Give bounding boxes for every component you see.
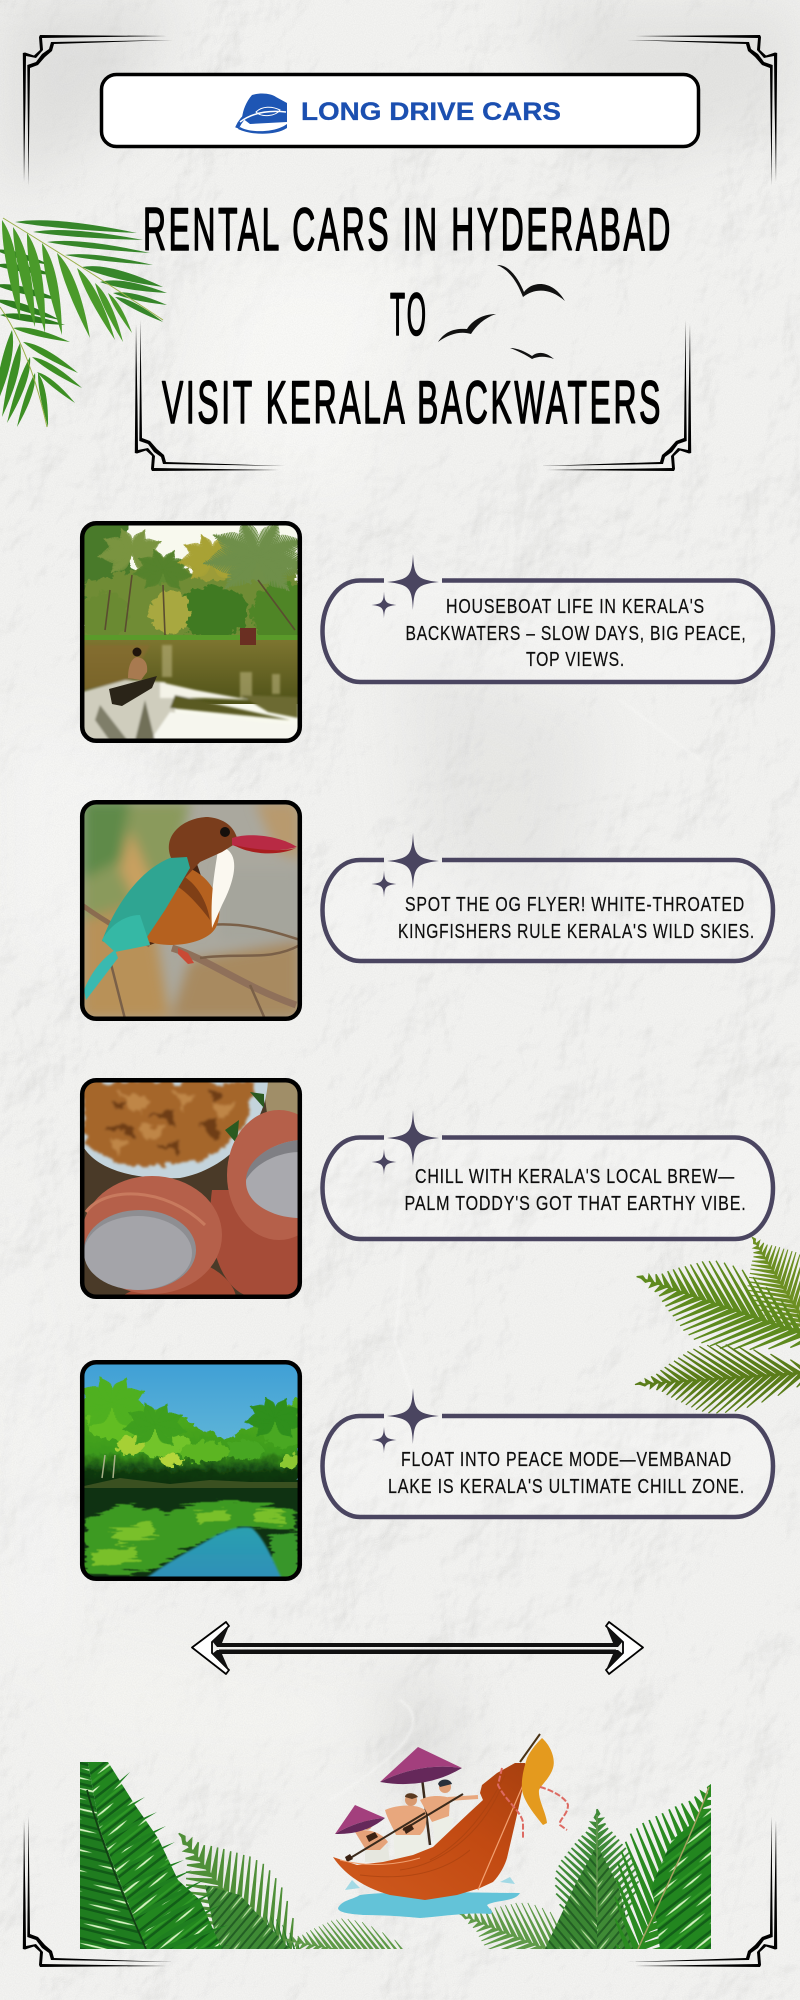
panel: palm toddy [82,1078,773,1297]
decorative frame: top right [627,35,777,186]
middle rower [385,1793,428,1860]
palm fronds: bottom [80,1762,711,1949]
illustration: snake boat with rowers [333,1734,568,1918]
title [143,196,673,436]
decorative frame: top left [23,35,173,186]
photo: backwater boat [80,514,315,741]
icon: car logo badge [237,94,287,134]
caption [388,1449,745,1498]
caption [404,1166,746,1215]
decorative frame: title left [135,320,285,471]
boat hull [333,1763,527,1900]
caption [406,596,746,671]
icon: large sparkle [387,554,439,610]
palm leaf: top left [0,217,168,428]
title: TO [390,281,428,348]
icon: small sparkle [372,1149,396,1175]
icon: small sparkle [372,592,396,618]
decorative frame: bottom right [627,1816,777,1967]
paddles [345,1794,463,1862]
caption [398,894,755,943]
callout pill [322,1110,773,1239]
front rower [420,1780,478,1845]
caption: HOUSEBOAT LIFE IN KERALA'S [446,596,705,618]
icon: small sparkle [372,1427,396,1453]
decorative frame: bottom left [23,1816,173,1967]
icon: small sparkle [372,871,396,897]
panel: vembanad lake [72,1362,773,1579]
small umbrella [335,1805,385,1834]
photo: palm-lined lake [72,1362,307,1579]
photo: clay pots of toddy [82,1078,331,1297]
decorative frame: title right [541,320,691,471]
flag [520,1734,540,1762]
ribbons [498,1768,568,1838]
icon: large sparkle [387,1110,439,1166]
panel: kingfisher [82,800,773,1019]
callout pill [322,1388,773,1517]
large umbrella [380,1747,462,1782]
photo: white-throated kingfisher [82,800,300,1019]
brand name: LONG DRIVE CARS [301,98,561,126]
icon: large sparkle [387,1388,439,1444]
icon: large sparkle [387,833,439,889]
water splash [338,1892,520,1918]
rear rower [355,1820,390,1862]
umbrella pole [422,1778,430,1845]
double-headed arrow [192,1622,643,1674]
logo banner [102,74,698,146]
panel: houseboat [80,514,773,741]
caption: TOP VIEWS. [526,649,625,671]
callout pill [322,833,773,961]
palm leaf: right side [623,1219,800,1419]
callout pill [322,554,773,682]
icon: flying birds [438,265,565,359]
